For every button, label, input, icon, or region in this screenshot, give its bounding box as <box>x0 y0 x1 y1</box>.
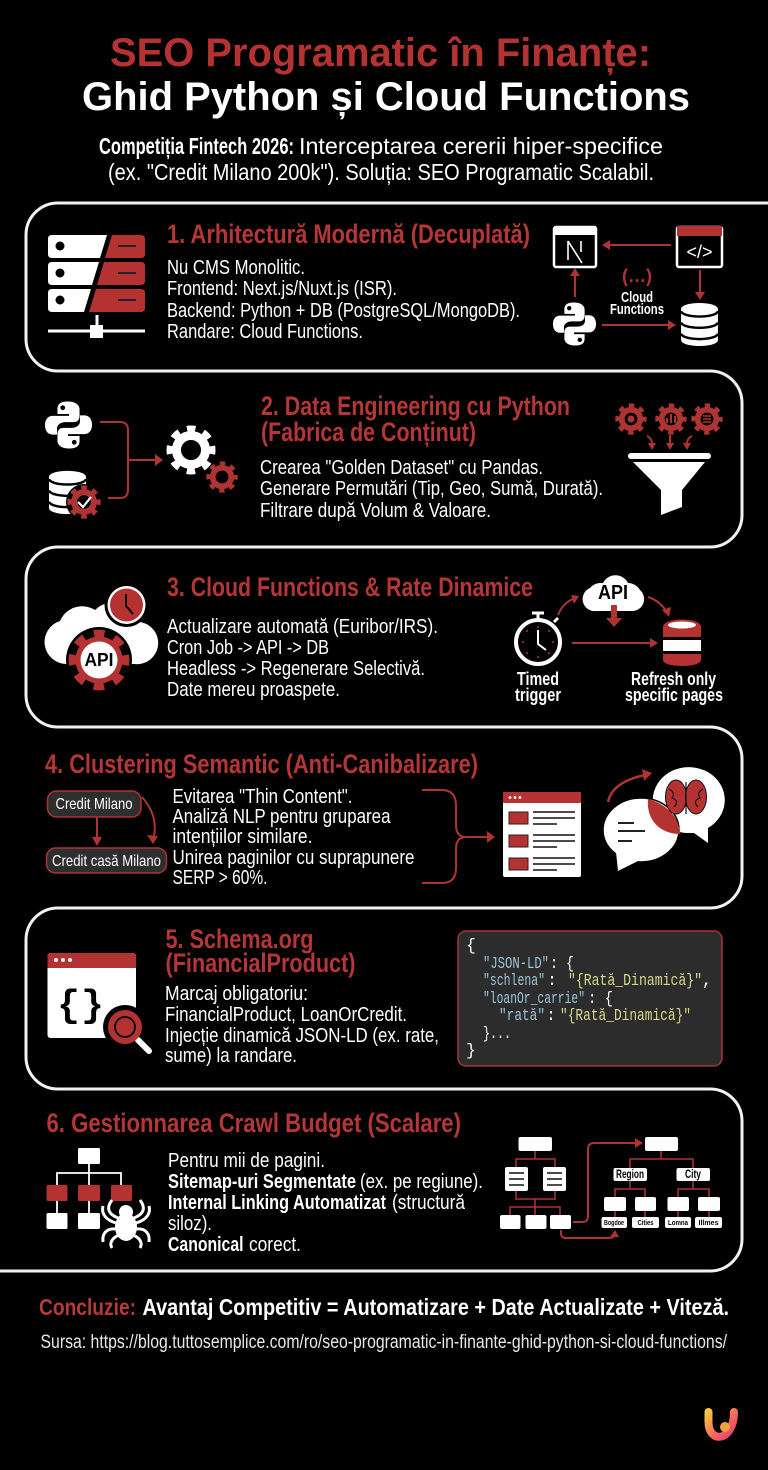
panel 4: clustering <box>26 727 742 908</box>
heading: 6. Gestionnarea Crawl Budget (Scalare) <box>46 1108 461 1138</box>
diagram: architecture flow: Cloud <box>621 290 653 306</box>
heading: (FinancialProduct) <box>166 948 356 978</box>
body text <box>260 456 603 522</box>
serpentine panel border <box>0 203 768 1271</box>
body text <box>167 615 438 701</box>
body text <box>165 982 439 1067</box>
body text: Nu CMS Monolitic. <box>167 256 305 279</box>
panel 2: data engineering <box>26 371 742 547</box>
body text: Unirea paginilor cu suprapunere <box>172 846 414 869</box>
body text: Actualizare automată (Euribor/IRS). <box>167 615 438 638</box>
code block: JSON-LD: }... <box>483 1024 511 1043</box>
icon: server rack <box>48 235 145 338</box>
diagram: architecture flow: (…) <box>622 266 652 286</box>
diagram: timed refresh: Timed <box>517 669 559 689</box>
body text: Injecție dinamică JSON-LD (ex. rate, <box>165 1024 439 1047</box>
body text: Pentru mii de pagini. <box>168 1149 325 1172</box>
panel 3: cloud functions <box>26 547 742 727</box>
diagram: site structure trees: Cities <box>638 1220 654 1227</box>
diagram: timed refresh: trigger <box>515 685 561 705</box>
code block: JSON-LD: : <box>547 971 557 990</box>
body text: Randare: Cloud Functions. <box>167 320 363 343</box>
icon: browser with braces and magnifier: { <box>57 985 80 1028</box>
subtitle: (ex. "Credit Milano 200k"). Soluția: SEO Programatic Scalabil. <box>108 159 654 185</box>
heading: 3. Cloud Functions & Rate Dinamice <box>167 572 533 602</box>
heading <box>166 924 356 978</box>
panel 5: schema <box>26 908 742 1089</box>
body text: corect. <box>249 1233 301 1256</box>
body text: (ex. pe regiune). <box>360 1170 483 1193</box>
body text: sume) la randare. <box>165 1044 297 1067</box>
panel 1: architecture <box>26 203 768 371</box>
code block: JSON-LD: "rată" <box>499 1006 545 1025</box>
body text: Analiză NLP pentru gruparea <box>172 805 391 828</box>
diagram: timed refresh: API <box>598 582 628 604</box>
diagram: site structure trees: City <box>685 1167 701 1181</box>
body text: intențiilor similare. <box>172 825 312 848</box>
title <box>82 31 690 119</box>
body text: Headless -> Regenerare Selectivă. <box>167 657 425 680</box>
diagram: keyword pills: Credit Milano <box>56 796 133 813</box>
arrow: merge bracket <box>422 790 495 883</box>
body text: Frontend: Next.js/Nuxt.js (ISR). <box>167 277 397 300</box>
body text: Backend: Python + DB (PostgreSQL/MongoDB). <box>167 299 520 322</box>
body text: Canonical <box>168 1233 244 1256</box>
body text: Marcaj obligatoriu: <box>165 982 308 1005</box>
code block: JSON-LD: "schlena" <box>483 971 545 990</box>
body text: Generare Permutări (Tip, Geo, Sumă, Durată). <box>260 477 603 500</box>
diagram: timed refresh <box>515 575 723 705</box>
title: Ghid Python și Cloud Functions <box>82 75 690 119</box>
body text <box>168 1149 483 1256</box>
heading: 1. Arhitectură Modernă (Decuplată) <box>167 219 530 249</box>
code block: JSON-LD: : { <box>550 954 574 973</box>
heading: 4. Clustering Semantic (Anti-Canibalizare) <box>45 749 478 779</box>
heading: (Fabrica de Conținut) <box>261 417 476 447</box>
subtitle: Interceptarea cererii hiper-specifice <box>299 133 663 159</box>
diagram: timed refresh: specific pages <box>625 685 723 705</box>
code block: JSON-LD: "{Rată_Dinamică}" <box>568 971 702 990</box>
icon: speech bubbles with brain <box>603 767 725 871</box>
diagram: architecture flow: </> <box>686 242 713 262</box>
body text: Date mereu proaspete. <box>167 678 340 701</box>
icon: browser with braces and magnifier: } <box>81 985 104 1028</box>
code block: JSON-LD: , <box>702 971 712 990</box>
code block: JSON-LD: { <box>466 936 476 955</box>
body text <box>172 785 414 889</box>
heading: 2. Data Engineering cu Python <box>261 391 570 421</box>
body text: Sitemap-uri Segmentate <box>168 1170 356 1193</box>
code block: JSON-LD: "loanOr_carrie" <box>483 989 585 1008</box>
body text: Evitarea "Thin Content". <box>172 785 352 808</box>
icon: data to gears <box>45 401 235 520</box>
panel 6: crawl budget <box>26 1089 742 1271</box>
body text: Crearea "Golden Dataset" cu Pandas. <box>260 456 543 479</box>
code block: JSON-LD: "{Rată_Dinamică}" <box>560 1006 691 1025</box>
code block: JSON-LD: : <box>546 1006 556 1025</box>
diagram: architecture flow <box>553 226 722 346</box>
icon: gears into funnel <box>618 406 720 515</box>
diagram: site structure trees: Region <box>616 1167 644 1181</box>
icon: cloud with clock and API gear <box>45 583 158 693</box>
diagram: architecture flow: Functions <box>610 302 664 318</box>
code block: JSON-LD: } <box>466 1041 476 1060</box>
diagram: site structure trees <box>500 1137 722 1238</box>
icon: logo <box>708 1412 734 1437</box>
body text: FinancialProduct, LoanOrCredit. <box>165 1003 407 1026</box>
diagram: keyword pills: Credit casă Milano <box>52 853 161 870</box>
conclusion: Concluzie: <box>39 1294 136 1320</box>
icon: merged page <box>503 792 581 877</box>
body text: (structură <box>392 1191 466 1214</box>
icon: sitemap with spider <box>46 1148 149 1248</box>
body text: Filtrare după Volum & Valoare. <box>260 499 491 522</box>
icon: cloud with clock and API gear: API <box>84 650 114 670</box>
heading: 5. Schema.org <box>166 924 314 954</box>
heading <box>261 391 570 447</box>
diagram: keyword pills <box>46 791 166 873</box>
body text: SERP > 60%. <box>172 866 268 889</box>
body text: siloz). <box>168 1212 212 1235</box>
subtitle: Competiția Fintech 2026: <box>99 133 294 160</box>
diagram: timed refresh: Refresh only <box>631 669 716 689</box>
diagram: site structure trees: Lomna <box>668 1220 688 1227</box>
subtitle <box>99 133 663 185</box>
body text: Internal Linking Automatizat <box>168 1191 386 1214</box>
icon: browser with braces and magnifier <box>48 953 149 1051</box>
code block: JSON-LD <box>458 931 722 1066</box>
title: SEO Programatic în Finanțe: <box>110 31 651 75</box>
body text: Cron Job -> API -> DB <box>167 636 329 659</box>
diagram: site structure trees: Illmes <box>698 1220 719 1227</box>
diagram: site structure trees: Bogdoe <box>604 1220 624 1227</box>
code block: JSON-LD: "JSON-LD" <box>483 954 549 973</box>
code block: JSON-LD: : { <box>588 989 613 1008</box>
body text <box>167 256 520 343</box>
